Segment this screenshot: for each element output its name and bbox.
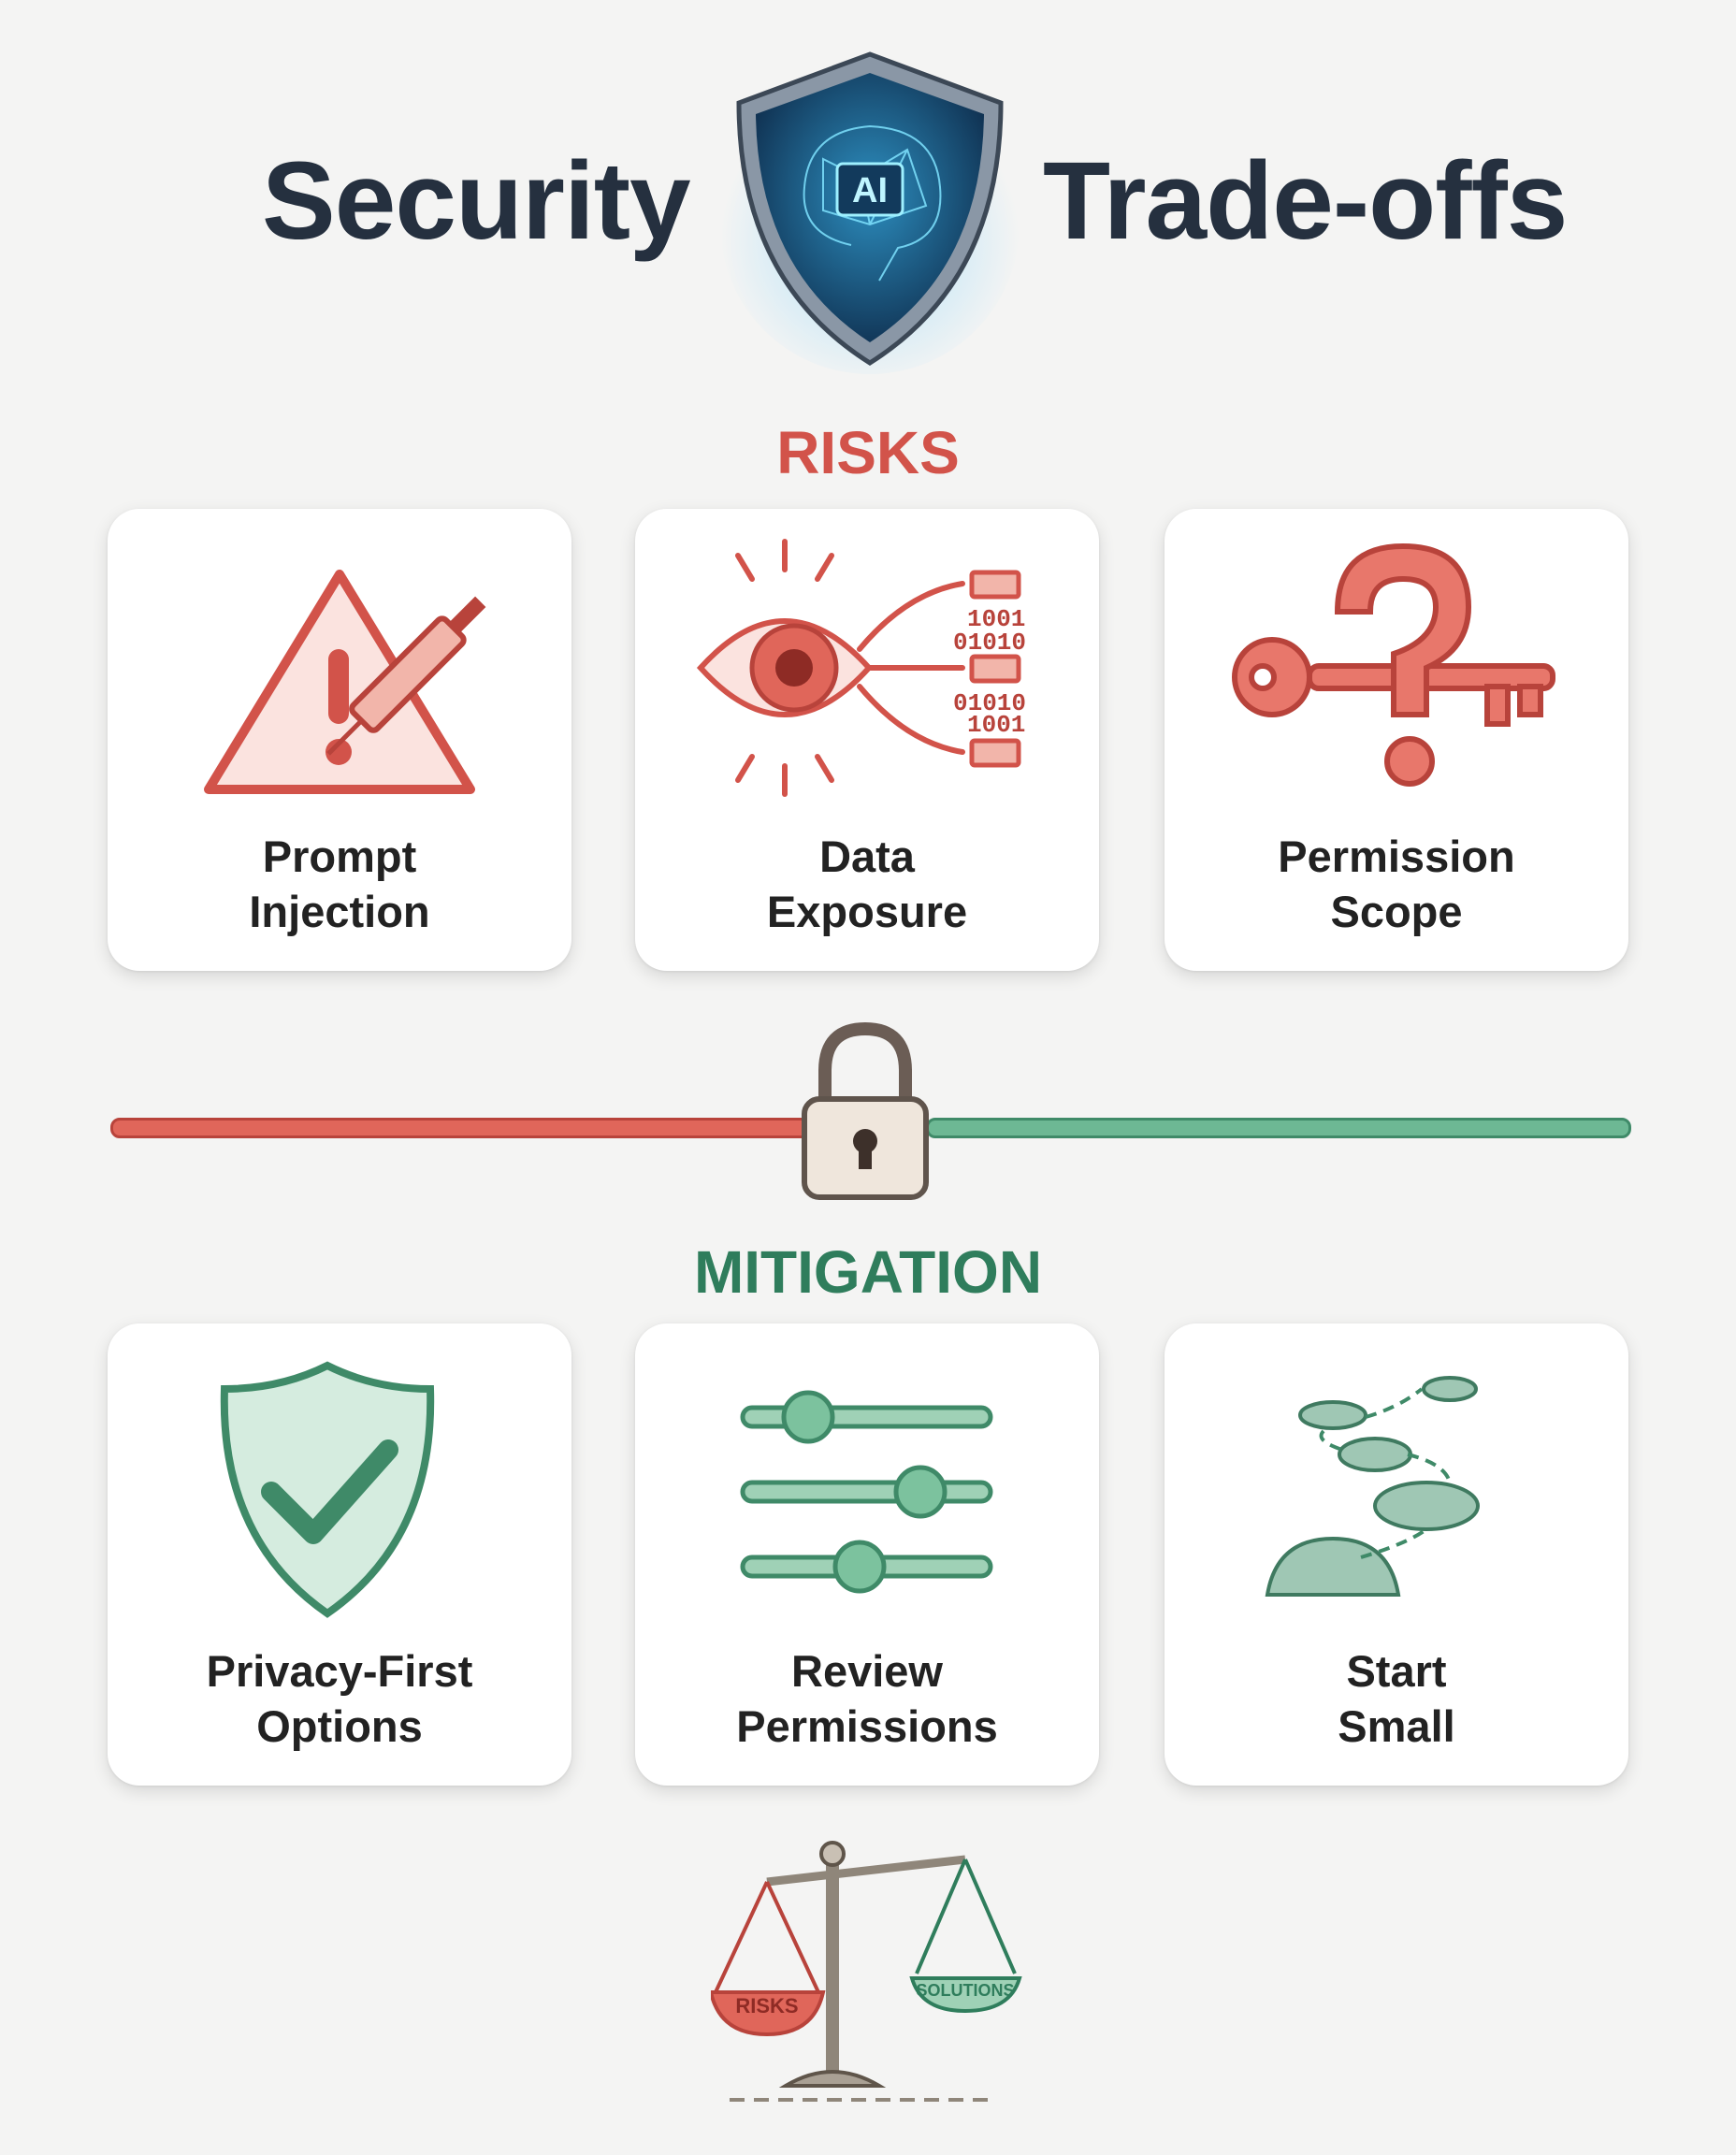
card: Privacy-First Options (108, 1323, 571, 1786)
icon: key question (1232, 543, 1555, 787)
card: Privacy-First Options: Options (256, 1701, 423, 1751)
icon: check shield (221, 1362, 434, 1618)
icon: eye with data: 01010 (953, 689, 1026, 717)
icon: AI shield (737, 51, 1003, 372)
icon: eye with data (697, 539, 1026, 797)
icon: balance scale: SOLUTIONS (916, 1981, 1015, 2000)
card: Start Small (1165, 1323, 1628, 1786)
card: Start Small: Small (1338, 1701, 1455, 1751)
icon: eye with data: 1001 (967, 711, 1025, 739)
heading: RISKS: RISKS (776, 419, 960, 486)
card: Prompt Injection: Injection (249, 887, 430, 936)
card: Permission Scope (1165, 509, 1628, 971)
heading: MITIGATION: MITIGATION (694, 1238, 1042, 1306)
card: Data Exposure: Data (819, 832, 915, 881)
card: Review Permissions: Permissions (736, 1701, 998, 1751)
icon: padlock (802, 1022, 929, 1200)
card: Review Permissions (635, 1323, 1099, 1786)
icon: balance scale: RISKS (735, 1994, 799, 2018)
card: Permission Scope: Scope (1330, 887, 1463, 936)
icon: sliders (741, 1390, 993, 1594)
card: Privacy-First Options: Privacy-First (207, 1646, 472, 1696)
card: Prompt Injection (108, 509, 571, 971)
card: Start Small: Start (1346, 1646, 1447, 1696)
icon: eye with data: 1001 (967, 605, 1025, 633)
title: Security: Security (262, 139, 690, 263)
icon: stepping stones (1265, 1376, 1480, 1597)
icon: warning with syringe (204, 570, 486, 794)
icon: AI shield: AI (852, 171, 888, 210)
icon: balance scale (711, 1841, 1022, 2102)
card: Review Permissions: Review (791, 1646, 943, 1696)
card: Data Exposure (635, 509, 1099, 971)
title: Trade-offs: Trade-offs (1043, 139, 1567, 263)
icon: eye with data: 01010 (953, 629, 1026, 657)
card: Prompt Injection: Prompt (263, 832, 416, 881)
slider with lock (110, 1022, 1631, 1200)
card: Permission Scope: Permission (1278, 832, 1515, 881)
card: Data Exposure: Exposure (767, 887, 967, 936)
